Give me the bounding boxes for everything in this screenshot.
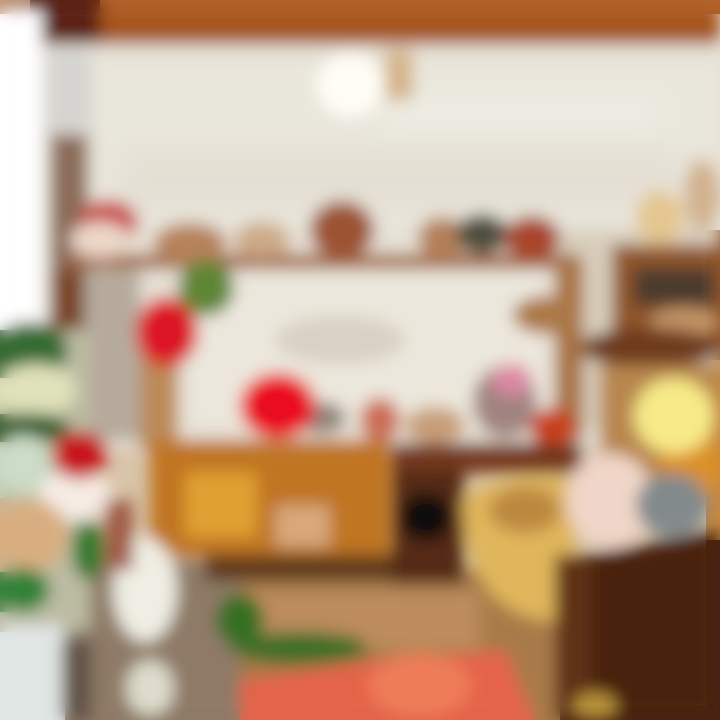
upper shelf [70,254,580,269]
green leaves by flower [178,260,234,316]
left plant [0,322,133,630]
lower wall panel [190,275,545,425]
items on sideboard [298,364,576,448]
white vase [113,538,177,716]
floor plant [216,594,368,664]
left dark column [50,135,88,360]
back wall [0,30,720,450]
floor [0,560,720,720]
sideboard [150,440,395,581]
left red flower [52,431,108,479]
shelf items [70,159,720,263]
cushions [566,453,708,547]
woven basket [462,476,575,622]
ceiling beam [0,0,720,44]
left window [0,10,90,330]
shelf side post [85,260,583,450]
red flower upper [136,297,198,367]
red rug [240,650,535,720]
right side warm lamp area [600,365,720,509]
armchair [555,530,720,720]
red flower centre [240,373,316,439]
yellow ball [634,378,714,454]
dark cabinet [392,443,582,584]
pendant lamp [316,50,413,117]
right cabinet [580,245,720,368]
left planter [0,625,92,720]
